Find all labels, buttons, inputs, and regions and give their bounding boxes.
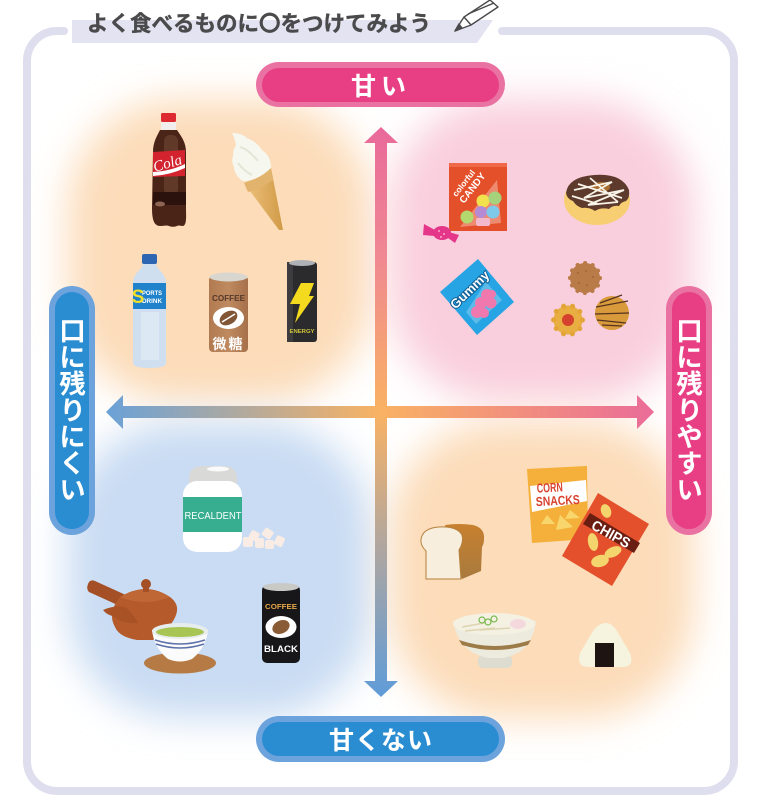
icon: rice ball <box>579 623 631 667</box>
icon: bread loaf <box>421 524 484 579</box>
panel: sweet and quick to clear <box>68 100 372 402</box>
panel: not sweet and lingering <box>390 422 694 718</box>
icon: sports drink bottle: DRINK <box>142 299 163 305</box>
icon: corn snacks bag: SNACKS <box>535 492 580 509</box>
label: lingers in mouth <box>666 286 712 535</box>
icon: cola bottle <box>151 113 186 227</box>
icon: chocolate stripe cookie <box>595 295 629 330</box>
icon: low sugar coffee can <box>209 272 248 354</box>
icon: wrapped candy <box>423 224 459 243</box>
icon: green tea cup <box>152 623 208 662</box>
title banner <box>72 7 493 43</box>
icon: gummy bag <box>440 259 514 335</box>
label: does not linger in mouth: 口に残りにくい <box>53 317 92 503</box>
icon: Recaldent gum jar <box>183 466 286 552</box>
panel: not sweet and quick to clear <box>68 422 372 718</box>
icon: saucer <box>144 652 216 674</box>
label: lingers in mouth: 口に残りやすい <box>670 317 709 503</box>
icon: gummy bag: Gummy <box>447 267 493 312</box>
panel: sweet and lingering <box>390 100 694 402</box>
icon: corn snacks bag: CORN <box>536 479 563 496</box>
icon: teapot <box>87 579 177 640</box>
icon: energy drink can <box>287 260 317 342</box>
horizontal arrow <box>106 395 654 429</box>
icon: colorful candy bag: CANDY <box>458 171 489 206</box>
icon: pencil <box>455 0 498 31</box>
icon: sports drink bottle <box>132 254 166 368</box>
icon: gum pellets <box>243 527 286 549</box>
icon: sports drink bottle: S <box>132 287 144 308</box>
label: does not linger in mouth <box>49 286 95 535</box>
vertical arrow <box>364 127 398 697</box>
icon: colorful candy bag <box>423 163 507 243</box>
icon: sports drink bottle: PORTS <box>142 291 162 297</box>
icon: low sugar coffee can: COFFEE <box>212 294 246 303</box>
icon: corn snacks bag <box>527 466 588 543</box>
icon: black coffee can <box>262 583 300 663</box>
icon: jam cookie <box>554 306 582 334</box>
icon: soft serve ice cream <box>232 133 283 230</box>
icon: colorful candy bag: colorful <box>450 168 477 199</box>
label: not sweet <box>256 716 505 762</box>
title text: よく食べるものに〇をつけてみよう <box>87 7 431 38</box>
label: sweet: 甘い <box>351 67 411 103</box>
icon: cola bottle: Cola <box>151 152 184 176</box>
icon: energy drink can: ENERGY <box>290 329 315 335</box>
icon: Recaldent gum jar: RECALDENT <box>184 511 242 522</box>
icon: round biscuit <box>570 263 600 293</box>
icon: chips bag: CHIPS <box>588 518 633 552</box>
icon: chocolate donut <box>564 175 630 225</box>
label: sweet <box>256 62 505 107</box>
icon: udon bowl <box>453 613 536 668</box>
label: not sweet: 甘くない <box>329 721 433 757</box>
icon: black coffee can: BLACK <box>264 644 298 655</box>
icon: cookies <box>554 263 629 334</box>
icon: low sugar coffee can: 微糖 <box>212 334 244 354</box>
icon: chips bag <box>562 493 649 586</box>
icon: black coffee can: COFFEE <box>265 602 297 611</box>
